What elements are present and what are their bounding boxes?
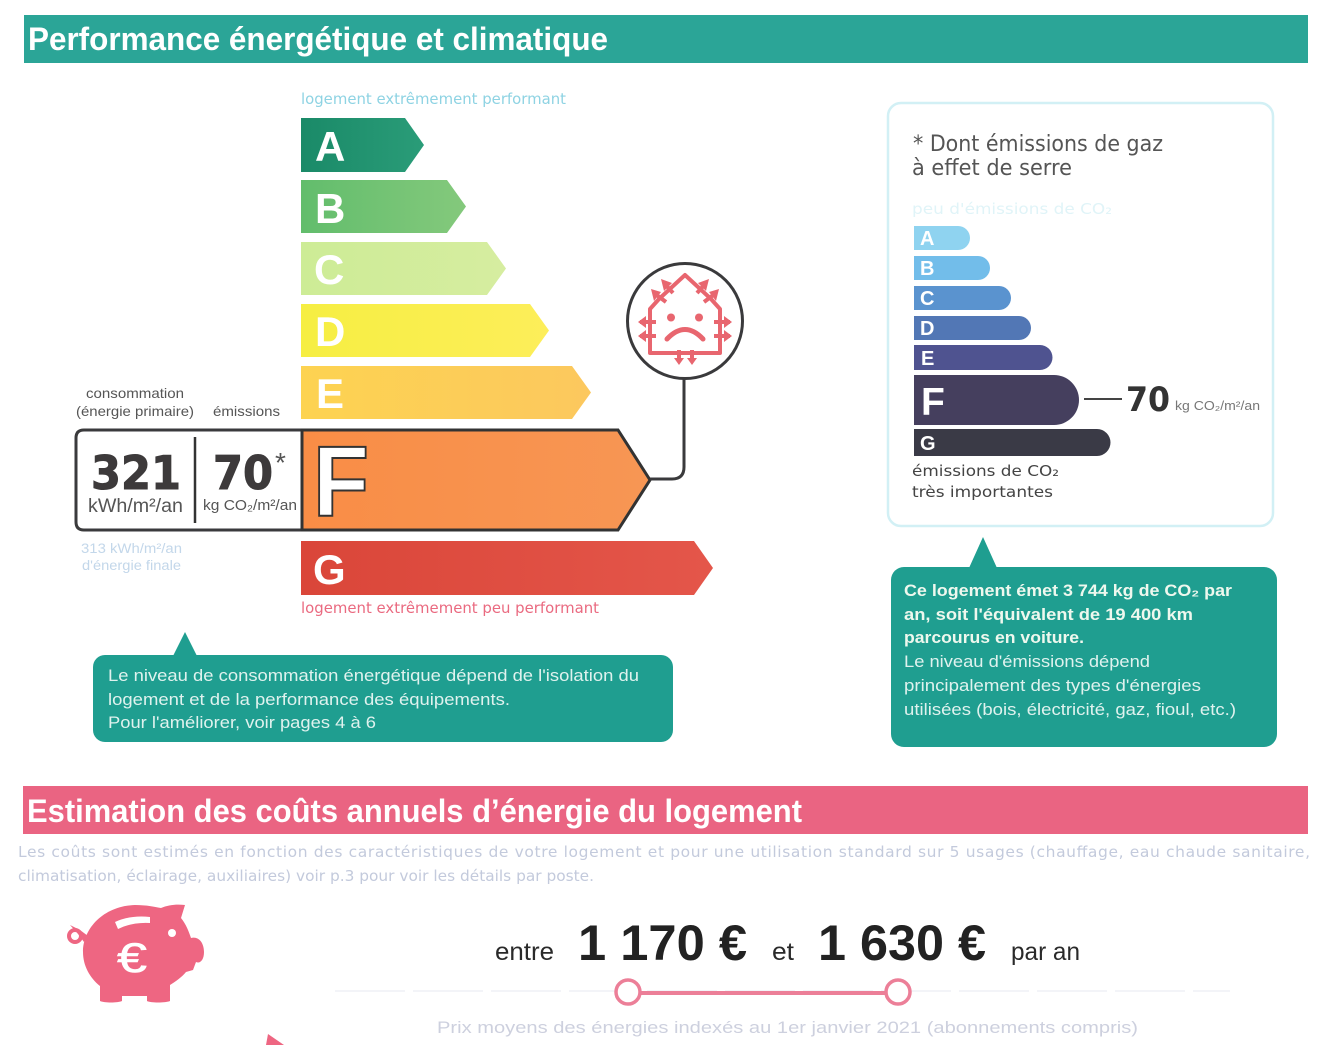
CO2 class A: A xyxy=(920,228,934,250)
class D arrow xyxy=(301,304,549,357)
class E arrow: E xyxy=(316,370,344,417)
CO2 class G: G xyxy=(920,433,936,455)
range slider xyxy=(335,980,1230,1004)
CO2 unit: kg CO₂/m²/an xyxy=(1175,398,1260,413)
heading: Estimation des coûts annuels: Estimation des coûts annuels d’énergie du logement xyxy=(27,793,802,829)
icon: sad house with heat losses xyxy=(628,264,742,378)
values box outline xyxy=(76,430,302,530)
letter F: F xyxy=(313,426,369,538)
final energy note xyxy=(81,541,182,573)
final energy note: 313 kWh/m²/an xyxy=(81,541,182,556)
column labels: consommation and emissions: consommation xyxy=(86,385,184,401)
panel heading: * Dont émissions de gaz xyxy=(913,132,1163,157)
entre: entre xyxy=(495,938,554,966)
panel: greenhouse gas emissions xyxy=(888,103,1273,526)
panel heading xyxy=(912,132,1163,181)
CO2 class B: B xyxy=(920,258,934,280)
callout: emissions: parcourus en voiture. xyxy=(904,628,1084,647)
panel heading: à effet de serre xyxy=(912,156,1072,181)
class C arrow xyxy=(301,242,506,295)
class E arrow xyxy=(301,366,591,419)
CO2 value: 70 xyxy=(1126,380,1170,420)
class F arrow xyxy=(302,430,650,530)
label: emissions tres importantes: émissions de CO₂ xyxy=(912,462,1059,480)
cost estimate xyxy=(495,915,1080,971)
class G arrow xyxy=(301,541,713,595)
callout: emissions: principalement des types d'énergies xyxy=(904,676,1201,695)
et: et xyxy=(772,938,794,966)
callout: emissions: utilisées (bois, électricité, gaz, fioul, etc.) xyxy=(904,700,1236,719)
label: logement extrêmement performant: logement extrêmement performant xyxy=(301,90,566,108)
CO2 class G xyxy=(914,429,1110,456)
asterisk: * xyxy=(275,447,286,478)
consumption value: 321 xyxy=(91,446,181,500)
label: emissions tres importantes: très importantes xyxy=(912,483,1053,501)
callout tip: pink xyxy=(266,1034,284,1045)
callout: emissions: Ce logement émet 3 744 kg de CO₂ par xyxy=(904,581,1232,600)
label: emissions tres importantes xyxy=(912,462,1059,501)
class B arrow xyxy=(301,180,466,233)
heading: Performance énergétique et climatique xyxy=(24,15,1308,63)
CO2 class E xyxy=(914,345,1052,370)
callout: consumption: Le niveau de consommation énergétique dépend de l'isolation du xyxy=(108,666,639,685)
high estimate: 1 630 € xyxy=(818,915,986,971)
class D arrow: D xyxy=(315,308,345,355)
current class F with values panel xyxy=(76,426,650,538)
CO2 scale xyxy=(914,226,1110,456)
callout: consumption: Pour l'améliorer, voir pages 4 à 6 xyxy=(108,713,376,732)
callout: consumption: logement et de la performance des équipements. xyxy=(108,690,510,709)
par an: par an xyxy=(1011,938,1080,966)
callout: emissions: Le niveau d'émissions dépend xyxy=(904,652,1150,671)
CO2 class D: D xyxy=(920,318,934,340)
CO2 class E: E xyxy=(921,348,934,370)
heading: Performance énergétique et climatique: Performance énergétique et climatique xyxy=(28,21,608,57)
callout: emissions xyxy=(891,537,1277,747)
heading: Estimation des coûts annuels xyxy=(23,786,1308,834)
column labels: consommation and emissions: (énergie primaire) xyxy=(76,403,194,419)
column labels: consommation and emissions xyxy=(76,385,280,419)
icon: piggy bank: € xyxy=(117,934,147,981)
callout: consumption xyxy=(93,632,673,742)
CO2 class D xyxy=(914,316,1031,340)
energy scale: classes A to G xyxy=(301,118,713,595)
marker line xyxy=(1084,398,1122,400)
intro text: climatisation, éclairage, auxiliaires) voir p.3 pour voir les détails par poste. xyxy=(18,867,594,885)
label: peu d'émissions de CO2: peu d'émissions de CO₂ xyxy=(912,200,1112,218)
callout: emissions: an, soit l'équivalent de 19 400 km xyxy=(904,605,1193,624)
CO2 class B xyxy=(914,256,990,280)
connector from F arrow to icon xyxy=(650,379,684,479)
class B arrow: B xyxy=(315,185,345,232)
class A arrow: A xyxy=(315,123,345,170)
class G arrow: G xyxy=(313,546,346,593)
column labels: consommation and emissions: émissions xyxy=(213,403,280,419)
low estimate: 1 170 € xyxy=(578,915,747,971)
CO2 class C: C xyxy=(920,288,934,310)
divider xyxy=(194,437,196,523)
class A arrow xyxy=(301,118,424,172)
emissions value: 70 xyxy=(213,446,273,500)
CO2 class F: F xyxy=(921,381,945,424)
CO2 class A xyxy=(914,226,970,250)
price note: Prix moyens des énergies indexés au 1er janvier 2021 (abonnements compris) xyxy=(437,1018,1138,1037)
label: logement extrêmement peu performant: logement extrêmement peu performant xyxy=(301,599,599,617)
emissions unit: kg CO₂/m²/an xyxy=(203,497,297,514)
intro text: Les coûts sont estimés en fonction des caractéristiques de votre logement et pour une utilisation standard sur 5 usages (chauffage, eau chaude sanitaire, xyxy=(18,843,1310,861)
CO2 class C xyxy=(914,286,1011,310)
icon: piggy bank xyxy=(69,905,204,1002)
intro text xyxy=(18,843,1310,885)
class C arrow: C xyxy=(314,246,344,293)
final energy note: d'énergie finale xyxy=(82,558,181,573)
consumption unit: kWh/m²/an xyxy=(88,496,183,517)
CO2 class F xyxy=(914,375,1079,425)
